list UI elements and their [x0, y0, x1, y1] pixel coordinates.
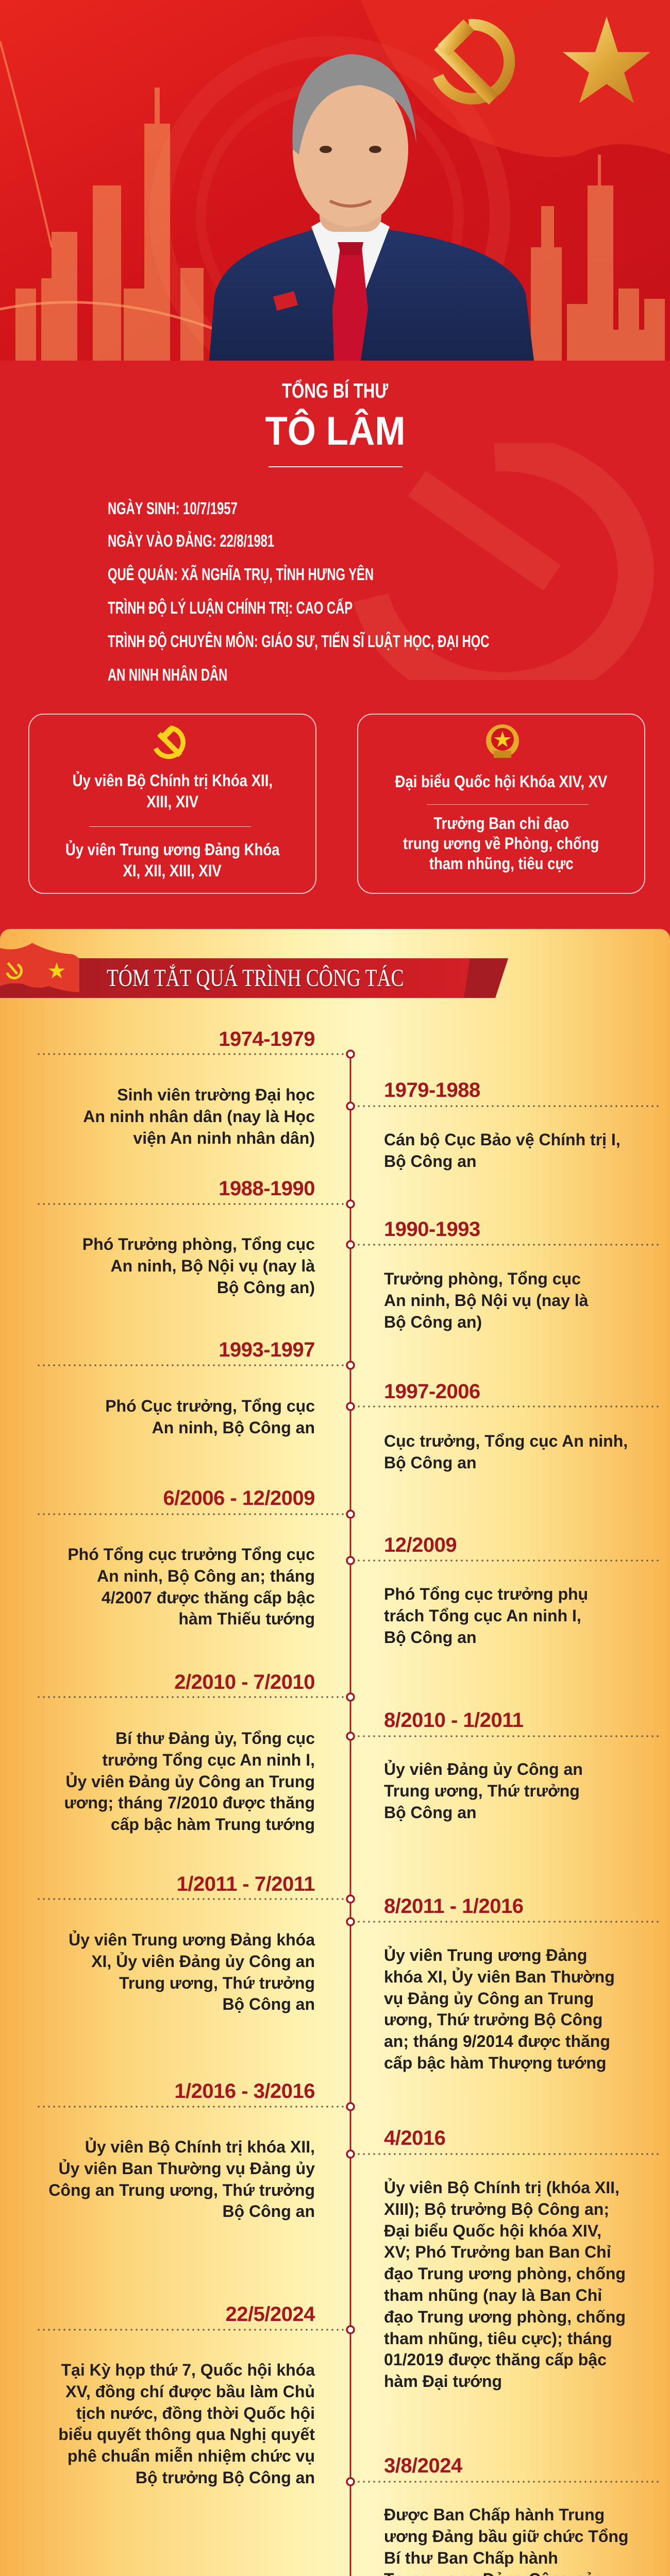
timeline entry: 22/5/2024: Bộ trưởng Bộ Công an — [136, 2468, 315, 2487]
timeline entry: 3/8/2024: ương Đảng bầu giữ chức Tổng — [384, 2527, 628, 2546]
timeline entry: 1974-1979: viện An ninh nhân dân) — [133, 1129, 315, 1147]
timeline entry: 1990-1993: An ninh, Bộ Nội vụ (nay là — [384, 1291, 588, 1310]
timeline entry: 8/2010 - 1/2011: Ủy viên Đảng ủy Công an — [384, 1760, 583, 1778]
text: anti-corruption head: trung ương về Phòng, chống — [403, 834, 599, 853]
timeline entry: 4/2016: tham nhũng (nay là Ban Chỉ — [384, 2286, 602, 2304]
header photo banner — [0, 0, 670, 361]
timeline entry: 6/2006 - 12/2009 — [68, 1487, 315, 1628]
timeline entry: 8/2011 - 1/2016: cấp bậc hàm Thượng tướng — [384, 2054, 606, 2072]
timeline entry: 12/2009: trách Tổng cục An ninh I, — [384, 1606, 581, 1625]
timeline entry: 8/2011 - 1/2016: khóa XI, Ủy viên Ban Thường — [384, 1968, 615, 1986]
timeline entry: 2/2010 - 7/2010: ương; tháng 7/2010 được thăng — [64, 1793, 315, 1812]
timeline entry: 1/2016 - 3/2016: Bộ Công an — [222, 2202, 315, 2221]
timeline entry: 1997-2006 — [384, 1380, 628, 1472]
timeline entry: 22/5/2024: 22/5/2024 — [226, 2303, 315, 2326]
timeline entry: 12/2009: Bộ Công an — [384, 1628, 477, 1647]
bio text block: QUÊ QUÁN: XÃ NGHĨA TRỤ, TỈNH HƯNG YÊN — [108, 565, 374, 584]
timeline entry: 8/2010 - 1/2011 — [384, 1709, 583, 1822]
timeline entry: 1/2011 - 7/2011 — [69, 1873, 315, 2013]
timeline entry: 22/5/2024 — [10, 2303, 320, 2491]
timeline entry: 1974-1979 — [83, 1028, 315, 1147]
timeline entry: 1/2016 - 3/2016: Công an Trung ương, Thứ trưởng — [48, 2181, 315, 2199]
timeline entry: 2/2010 - 7/2010 — [64, 1671, 315, 1834]
timeline entry: 1974-1979: An ninh nhân dân (nay là Học — [83, 1107, 315, 1126]
timeline entry: 1/2011 - 7/2011: Bộ Công an — [222, 1995, 315, 2013]
bio text block: TRÌNH ĐỘ CHUYÊN MÔN: GIÁO SƯ, TIẾN SĨ LUẬT HỌC, ĐẠI HỌC — [108, 632, 489, 651]
timeline entry: 1990-1993: Trưởng phòng, Tổng cục — [384, 1269, 581, 1288]
timeline entry: 6/2006 - 12/2009: hàm Thiếu tướng — [178, 1609, 315, 1628]
timeline entry: 4/2016: Ủy viên Bộ Chính trị (khóa XII, — [384, 2178, 619, 2197]
timeline entry: 12/2009 — [384, 1534, 588, 1647]
text: politburo member: XIII, XIV — [146, 792, 198, 811]
timeline entry: 8/2011 - 1/2016 — [384, 1895, 615, 2072]
timeline entry: 1/2011 - 7/2011: XI, Ủy viên Đảng ủy Công an — [91, 1952, 315, 1971]
timeline entry: 22/5/2024: phê chuẩn miễn nhiệm chức vụ — [68, 2447, 315, 2465]
timeline entry: 1988-1990: Bộ Công an) — [217, 1278, 315, 1297]
text: national assembly deputy: Đại biểu Quốc hội Khóa XIV, XV — [395, 772, 607, 791]
timeline entry: 1/2016 - 3/2016: Ủy viên Bộ Chính trị khóa XII, — [85, 2138, 315, 2156]
timeline entry: 1979-1988 — [384, 1079, 621, 1171]
timeline entry: 4/2016: XV; Phó Trưởng ban Ban Chỉ — [384, 2243, 611, 2261]
timeline entry: 8/2011 - 1/2016: ương, Thứ trưởng Bộ Công — [384, 2010, 602, 2029]
timeline entry: 1979-1988: Cán bộ Cục Bảo vệ Chính trị I, — [384, 1130, 621, 1149]
timeline entry: 4/2016: Đại biểu Quốc hội khóa XIV, — [384, 2222, 601, 2240]
bio text block: NGÀY VÀO ĐẢNG: 22/8/1981 — [108, 531, 274, 550]
timeline entry: 6/2006 - 12/2009: 6/2006 - 12/2009 — [163, 1487, 315, 1510]
timeline entry: 4/2016: 01/2019 được thăng cấp bậc — [384, 2350, 607, 2369]
timeline entry: 1993-1997: 1993-1997 — [219, 1338, 315, 1361]
text: politburo member — [72, 771, 273, 811]
text: anti-corruption head: Trưởng Ban chỉ đạo — [433, 814, 569, 833]
timeline entry: 1/2016 - 3/2016 — [48, 2080, 315, 2221]
timeline entry: 2/2010 - 7/2010: 2/2010 - 7/2010 — [174, 1671, 315, 1693]
timeline entry: 4/2016: đạo Trung ương phòng, chống — [384, 2308, 626, 2326]
timeline entry: 8/2010 - 1/2011: Bộ Công an — [384, 1803, 477, 1822]
timeline entry: 1/2011 - 7/2011: Trung ương, Thứ trưởng — [119, 1974, 315, 1992]
text: politburo member: Ủy viên Bộ Chính trị Khóa XII, — [72, 771, 273, 790]
title underline — [269, 466, 403, 467]
timeline entry: 1/2016 - 3/2016: Ủy viên Ban Thường vụ Đảng ủy — [58, 2159, 315, 2178]
icon: national emblem — [486, 724, 519, 758]
timeline entry: 1/2011 - 7/2011: Ủy viên Trung ương Đảng khóa — [69, 1930, 315, 1949]
timeline entry: 2/2010 - 7/2010: trưởng Tổng cục An ninh I, — [102, 1751, 315, 1769]
timeline entry: 12/2009: Phó Tổng cục trưởng phụ — [384, 1585, 588, 1603]
title: TỔNG BÍ THƯ — [282, 380, 388, 402]
panel: timeline background — [0, 929, 670, 2576]
timeline entry: 1988-1990: 1988-1990 — [219, 1177, 315, 1200]
timeline entry: 4/2016 — [384, 2127, 626, 2391]
timeline entry: 3/8/2024: Được Ban Chấp hành Trung — [384, 2505, 605, 2524]
timeline entry: 4/2016: đạo Trung ương phòng, chống — [384, 2264, 626, 2283]
timeline entry: 1988-1990: An ninh, Bộ Nội vụ (nay là — [111, 1257, 315, 1275]
timeline entry: 1990-1993: 1990-1993 — [384, 1218, 480, 1241]
timeline entry: 2/2010 - 7/2010: cấp bậc hàm Trung tướng — [111, 1815, 315, 1834]
bio text block: AN NINH NHÂN DÂN — [108, 665, 227, 684]
text: central committee member — [65, 840, 280, 880]
panel: party positions — [28, 714, 316, 894]
timeline entry: 1979-1988: Bộ Công an — [384, 1152, 477, 1171]
timeline entry: 6/2006 - 12/2009: Phó Tổng cục trưởng Tổng cục — [68, 1545, 315, 1564]
timeline entry: 4/2016: tham nhũng, tiêu cực); tháng — [384, 2329, 612, 2348]
decorative watermark — [354, 443, 654, 680]
timeline entry: 1997-2006: 1997-2006 — [384, 1380, 480, 1403]
timeline entry: 1993-1997 — [105, 1338, 315, 1437]
timeline entry: 3/8/2024: 3/8/2024 — [384, 2454, 462, 2477]
text: anti-corruption head — [403, 814, 599, 873]
title: TÔ LÂM — [265, 408, 405, 453]
timeline entry: 22/5/2024: tịch nước, đồng thời Quốc hội — [76, 2404, 315, 2422]
timeline entry: 12/2009: 12/2009 — [384, 1534, 457, 1556]
timeline entry: 6/2006 - 12/2009: 4/2007 được thăng cấp bậc — [102, 1588, 315, 1607]
timeline entry: 1990-1993 — [384, 1218, 589, 1331]
timeline entry: 1997-2006: Bộ Công an — [384, 1453, 477, 1472]
title — [265, 379, 405, 453]
timeline entry: 1990-1993: Bộ Công an) — [384, 1313, 482, 1331]
timeline entry: 8/2011 - 1/2016: an; tháng 9/2014 được thăng — [384, 2032, 610, 2050]
text: anti-corruption head: tham nhũng, tiêu cực — [429, 854, 573, 873]
bio text block — [108, 499, 489, 684]
timeline entry: 22/5/2024: XV, đồng chí được bầu làm Chủ — [65, 2382, 315, 2401]
timeline entry: 3/8/2024: Bí thư Ban Chấp hành — [384, 2549, 558, 2567]
heading text: TÓM TẮT QUÁ TRÌNH CÔNG TÁC — [107, 964, 404, 992]
bio text block: TRÌNH ĐỘ LÝ LUẬN CHÍNH TRỊ: CAO CẤP — [108, 598, 353, 617]
bio text block: NGÀY SINH: 10/7/1957 — [108, 499, 238, 518]
section heading banner — [0, 943, 508, 998]
timeline entry: 6/2006 - 12/2009: An ninh, Bộ Công an; tháng — [97, 1567, 315, 1585]
timeline entry: 1993-1997: An ninh, Bộ Công an — [152, 1418, 315, 1437]
timeline entry: 22/5/2024: biểu quyết thông qua Nghị quyết — [58, 2425, 315, 2444]
timeline entry: 8/2011 - 1/2016: 8/2011 - 1/2016 — [384, 1895, 524, 1918]
timeline entry: 1997-2006: Cục trưởng, Tổng cục An ninh, — [384, 1432, 628, 1450]
timeline entry: 2/2010 - 7/2010: Ủy viên Đảng ủy Công an Trung — [65, 1772, 315, 1791]
timeline entry: 1/2011 - 7/2011: 1/2011 - 7/2011 — [177, 1873, 315, 1895]
text: central committee member: XI, XII, XIII, XIV — [123, 861, 222, 880]
timeline entry: 4/2016: XIII); Bộ trưởng Bộ Công an; — [384, 2200, 609, 2218]
timeline entry: 8/2010 - 1/2011: 8/2010 - 1/2011 — [384, 1709, 524, 1732]
timeline entry: 1974-1979: 1974-1979 — [219, 1028, 315, 1050]
timeline entry: 1988-1990: Phó Trưởng phòng, Tổng cục — [82, 1235, 315, 1253]
timeline entry: 1/2016 - 3/2016: 1/2016 - 3/2016 — [174, 2080, 315, 2103]
panel: state positions — [357, 714, 645, 894]
timeline entry: 4/2016: 4/2016 — [384, 2127, 445, 2149]
timeline entry: 1993-1997: Phó Cục trưởng, Tổng cục — [105, 1397, 315, 1415]
timeline entry: 8/2011 - 1/2016: Ủy viên Trung ương Đảng — [384, 1946, 587, 1964]
text: central committee member: Ủy viên Trung ương Đảng Khóa — [65, 840, 279, 859]
timeline entry: 8/2011 - 1/2016: vụ Đảng ủy Công an Trung — [384, 1989, 594, 2008]
icon: hammer and sickle — [154, 725, 186, 759]
timeline entry: 2/2010 - 7/2010: Bí thư Đảng ủy, Tổng cục — [115, 1729, 315, 1748]
timeline entry: 1974-1979: Sinh viên trường Đại học — [117, 1086, 315, 1104]
timeline entry: 8/2010 - 1/2011: Trung ương, Thứ trưởng — [384, 1782, 580, 1800]
timeline entry: 1979-1988: 1979-1988 — [384, 1079, 480, 1101]
timeline entry: 1988-1990 — [82, 1177, 315, 1297]
timeline entry: 3/8/2024 — [384, 2454, 667, 2576]
timeline entry: 22/5/2024: Tại Kỳ họp thứ 7, Quốc hội khóa — [61, 2361, 315, 2379]
timeline entry: 4/2016: hàm Đại tướng — [384, 2372, 502, 2391]
